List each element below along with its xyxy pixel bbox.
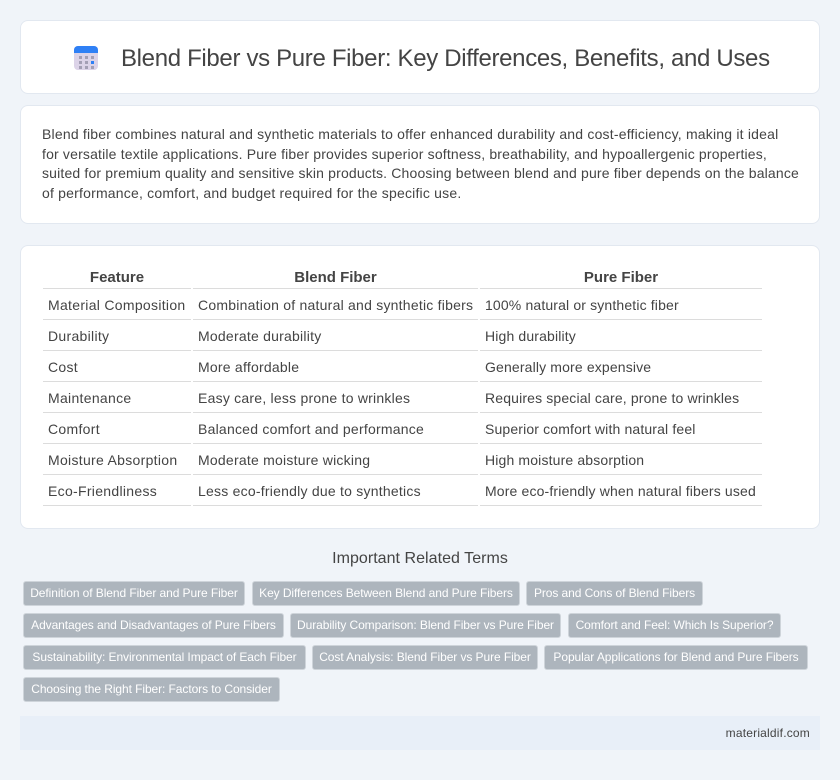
text block: introduction: Blend fiber combines natural and synthetic materials to offer enhanced durability and cost-efficiency, making it ideal <box>42 126 778 142</box>
footer source text: materialdif.com <box>726 726 810 740</box>
text block: introduction <box>42 126 799 201</box>
row: moisture absorption: High moisture absorption <box>485 452 644 468</box>
tag list: related terms <box>23 581 808 702</box>
row: comfort <box>48 421 696 437</box>
tag <box>23 677 280 702</box>
row: cost: Generally more expensive <box>485 359 651 375</box>
row: material composition: Material Composition <box>48 297 186 313</box>
row: material composition: 100% natural or synthetic fiber <box>485 297 679 313</box>
row: durability: Durability <box>48 328 109 344</box>
tag: Key Differences Between Blend and Pure Fibers <box>259 586 513 600</box>
row: eco-friendliness: More eco-friendly when natural fibers used <box>485 483 756 499</box>
tag <box>252 581 520 606</box>
tag: Durability Comparison: Blend Fiber vs Pure Fiber <box>297 618 554 632</box>
title: Blend Fiber vs Pure Fiber: Key Differences, Benefits, and Uses <box>121 45 770 72</box>
row: eco-friendliness: Less eco-friendly due to synthetics <box>198 483 421 499</box>
tag: Popular Applications for Blend and Pure Fibers <box>553 650 799 664</box>
row: moisture absorption <box>48 452 644 468</box>
panel: comparison table <box>20 245 820 529</box>
tag: Definition of Blend Fiber and Pure Fiber <box>30 586 238 600</box>
panel: header <box>20 20 820 94</box>
table heading: pure fiber: Pure Fiber <box>584 269 658 286</box>
tag: Pros and Cons of Blend Fibers <box>534 586 695 600</box>
tag <box>23 613 284 638</box>
table heading: blend fiber: Blend Fiber <box>294 269 377 286</box>
row: durability: High durability <box>485 328 576 344</box>
tag: Advantages and Disadvantages of Pure Fibers <box>31 618 276 632</box>
text block: introduction: for versatile textile applications. Pure fiber provides superior softness, breathability, and hypoallergenic properties, <box>42 146 767 162</box>
row: durability <box>48 328 576 344</box>
footer bar <box>20 716 820 750</box>
text block: introduction: of performance, comfort, and budget required for the specific use. <box>42 185 461 201</box>
table heading: feature: Feature <box>90 269 144 286</box>
row: maintenance <box>48 390 739 406</box>
tag <box>23 645 306 670</box>
row: material composition: Combination of natural and synthetic fibers <box>198 297 473 313</box>
tag: Cost Analysis: Blend Fiber vs Pure Fiber <box>319 650 531 664</box>
row: maintenance: Easy care, less prone to wrinkles <box>198 390 410 406</box>
row: eco-friendliness <box>48 483 756 499</box>
tag <box>568 613 781 638</box>
heading: related terms: Important Related Terms <box>332 550 508 567</box>
row: comfort: Superior comfort with natural feel <box>485 421 696 437</box>
row: moisture absorption: Moderate moisture wicking <box>198 452 370 468</box>
row: moisture absorption: Moisture Absorption <box>48 452 177 468</box>
row: cost: More affordable <box>198 359 299 375</box>
icon: calendar <box>74 46 98 70</box>
tag: Choosing the Right Fiber: Factors to Consider <box>31 682 272 696</box>
text block: introduction: suited for premium quality and sensitive skin products. Choosing between blend and pure fiber depends on the balance <box>42 165 799 181</box>
row: cost: Cost <box>48 359 78 375</box>
tag <box>312 645 538 670</box>
row: maintenance: Maintenance <box>48 390 131 406</box>
row: comfort: Balanced comfort and performance <box>198 421 424 437</box>
tag <box>23 581 245 606</box>
tag: Comfort and Feel: Which Is Superior? <box>576 618 773 632</box>
tag <box>526 581 703 606</box>
row: material composition <box>48 297 679 313</box>
tag: Sustainability: Environmental Impact of Each Fiber <box>32 650 297 664</box>
panel: introduction <box>20 105 820 224</box>
tag <box>544 645 808 670</box>
row: eco-friendliness: Eco-Friendliness <box>48 483 157 499</box>
row: maintenance: Requires special care, prone to wrinkles <box>485 390 739 406</box>
row: comfort: Comfort <box>48 421 100 437</box>
tag <box>290 613 561 638</box>
row: cost <box>48 359 651 375</box>
row: durability: Moderate durability <box>198 328 321 344</box>
